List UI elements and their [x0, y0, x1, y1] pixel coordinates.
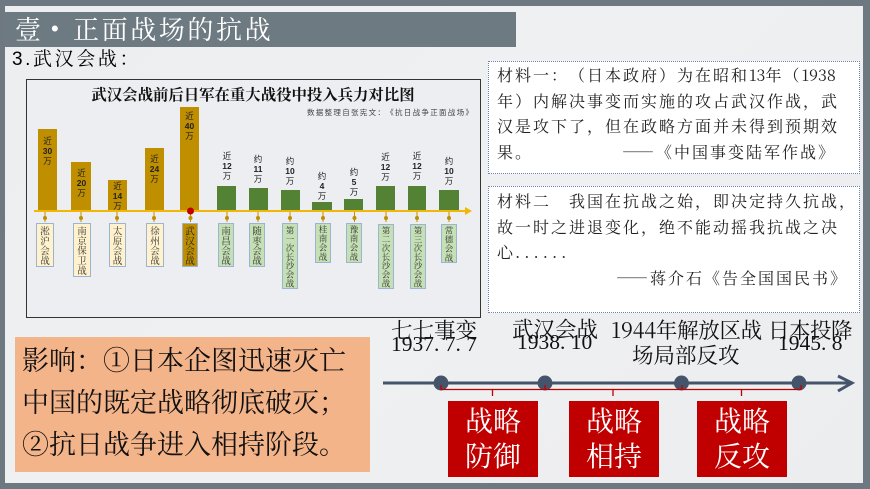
bar: 第三次长沙会战: 12 [412, 161, 422, 171]
title bar: 正面战场的抗战 [73, 10, 273, 47]
bar: 桂南会战: 万 [318, 191, 326, 201]
label: 淞沪会战: 淞沪会战 [38, 225, 52, 266]
material two: 心...... [497, 240, 570, 263]
title bar: 壹 [15, 10, 44, 47]
marker: 武汉会战 [187, 208, 194, 214]
bracket [441, 385, 801, 396]
label: 常德会战: 常德会战 [443, 225, 455, 263]
box: 战略防御 [448, 401, 538, 477]
bar: 徐州会战: 24 [150, 164, 159, 174]
material one: 材料一：（日本政府）为在昭和13年（1938 [497, 63, 836, 86]
timeline date: 1945: 1945. 8 [778, 331, 842, 355]
bar: 南京保卫战: 近 [77, 168, 86, 178]
chart source note: 数据整理自张宪文：《抗日战争正面战场》 [307, 107, 474, 117]
bar: 随枣会战 [249, 154, 268, 210]
bar: 随枣会战: 11 [254, 164, 263, 174]
timeline label: 1944: 场局部反攻 [632, 339, 740, 370]
box: 战略反攻: 反攻 [714, 434, 770, 474]
box: 战略反攻 [697, 401, 787, 477]
box: 战略相持: 相持 [586, 434, 642, 474]
timeline date: 1938: 1938. 10 [517, 330, 592, 354]
bar: 第一次长沙会战: 万 [286, 176, 294, 186]
bar: 第二次长沙会战: 万 [381, 172, 390, 182]
bar: 南昌会战: 近 [223, 151, 232, 161]
axis stems [44, 212, 450, 222]
label: 武汉会战: 武汉会战 [183, 225, 197, 266]
label: 第二次长沙会战: 第二次长沙会战 [380, 225, 392, 288]
bar: 太原会战: 近 [113, 181, 122, 191]
material one: 果。 [497, 140, 533, 163]
bar: 豫南会战 [344, 167, 363, 210]
bar: 常德会战 [439, 156, 459, 210]
bar: 南昌会战 [217, 151, 236, 210]
timeline [383, 374, 856, 396]
bar: 常德会战: 约 [445, 156, 453, 166]
material one [488, 61, 860, 174]
impact callout: 影响：①日本企图迅速灭亡 [22, 339, 346, 378]
timeline label: 武汉会战: 武汉会战 [512, 313, 598, 344]
bar: 随枣会战: 万 [254, 174, 262, 184]
bar: 太原会战 [108, 180, 127, 211]
box: 战略相持: 战略 [586, 400, 642, 440]
bar: 淞沪会战: 30 [43, 146, 52, 156]
material two: ——蒋介石《告全国国民书》 [616, 266, 848, 289]
timeline label: 日本投降: 日本投降 [768, 314, 852, 345]
box: 战略相持 [569, 401, 659, 477]
bar: 淞沪会战 [38, 129, 57, 210]
material two [488, 186, 860, 313]
label: 南京保卫战: 南京保卫战 [75, 225, 89, 276]
label: 太原会战: 太原会战 [110, 225, 124, 266]
label: 南昌会战: 南昌会战 [219, 225, 233, 266]
label: 豫南会战: 豫南会战 [348, 224, 360, 262]
timeline label: 七七事变: 七七事变 [391, 314, 477, 345]
bar: 南昌会战: 12 [222, 161, 232, 171]
timeline dots [434, 376, 806, 390]
bar: 太原会战: 14 [113, 191, 122, 201]
bar: 随枣会战: 约 [254, 154, 262, 164]
bar: 淞沪会战: 万 [43, 156, 52, 166]
timeline arrow [383, 376, 852, 391]
bar: 第三次长沙会战: 近 [413, 151, 422, 161]
material two: 故一时之进退变化，绝不能动摇我抗战之决 [497, 215, 839, 238]
timeline label: 1944: 1944年解放区战 [611, 314, 762, 345]
bar: 桂南会战 [312, 171, 332, 210]
label: 桂南会战: 桂南会战 [317, 224, 329, 262]
bar: 武汉会战: 近 [185, 111, 194, 121]
bar: 武汉会战: 万 [185, 131, 194, 141]
bar: 徐州会战: 万 [150, 174, 159, 184]
bar: 第二次长沙会战: 近 [381, 152, 390, 162]
timeline date: 1937: 1937. 7. 7 [391, 332, 477, 356]
bar: 南京保卫战: 20 [77, 178, 86, 188]
material two: 材料二 我国在抗战之始，即决定持久抗战， [497, 189, 857, 212]
box: 战略反攻: 战略 [714, 400, 770, 440]
bar: 南昌会战: 万 [223, 171, 231, 181]
bar: 桂南会战: 约 [318, 171, 326, 181]
bar: 第一次长沙会战: 10 [285, 166, 295, 176]
bar: 第一次长沙会战 [281, 156, 300, 210]
bar: 豫南会战: 5 [352, 177, 357, 187]
label: 第三次长沙会战: 第三次长沙会战 [412, 225, 424, 288]
bar: 常德会战: 10 [444, 166, 454, 176]
bar: 淞沪会战: 近 [43, 136, 52, 146]
title bar: • [51, 16, 61, 41]
box: 战略防御: 战略 [465, 400, 521, 440]
bar: 桂南会战: 4 [320, 181, 325, 191]
box: 战略防御: 防御 [465, 434, 521, 474]
bar: 第一次长沙会战: 约 [286, 156, 294, 166]
bar: 豫南会战: 约 [350, 167, 358, 177]
bar: 常德会战: 万 [445, 176, 453, 186]
bar: 徐州会战: 近 [150, 154, 159, 164]
bar: 第三次长沙会战 [408, 151, 426, 210]
axis [34, 207, 472, 215]
material one: ——《中国事变陆军作战》 [622, 140, 836, 163]
title bar [5, 12, 516, 47]
bar: 第二次长沙会战: 12 [381, 162, 390, 172]
bar: 南京保卫战 [71, 162, 91, 210]
bar: 武汉会战 [180, 107, 199, 210]
bar: 南京保卫战: 万 [77, 188, 86, 198]
impact callout: 中国的既定战略彻底破灭； [22, 381, 346, 420]
bar: 徐州会战 [145, 148, 164, 210]
timeline label: 1944 [611, 314, 762, 370]
bar: 第三次长沙会战: 万 [413, 171, 421, 181]
chart title: 武汉会战前后日军在重大战役中投入兵力对比图 [91, 83, 415, 105]
impact callout: ②抗日战争进入相持阶段。 [22, 423, 346, 462]
label: 徐州会战: 徐州会战 [148, 225, 162, 266]
bar: 第二次长沙会战 [376, 152, 395, 210]
impact callout [15, 337, 370, 472]
bar: 豫南会战: 万 [350, 187, 358, 197]
panel: bar chart [26, 79, 481, 318]
bar: 太原会战: 万 [113, 201, 122, 211]
material one: 汉是攻下了，但在政略方面并未得到预期效 [497, 114, 839, 137]
label: 第一次长沙会战: 第一次长沙会战 [284, 225, 296, 288]
label: 随枣会战: 随枣会战 [250, 225, 264, 266]
bar: 武汉会战: 40 [185, 121, 194, 131]
material one: 年）内解决事变而实施的攻占武汉作战，武 [497, 89, 839, 112]
subheading: 3.武汉会战： [12, 49, 141, 70]
